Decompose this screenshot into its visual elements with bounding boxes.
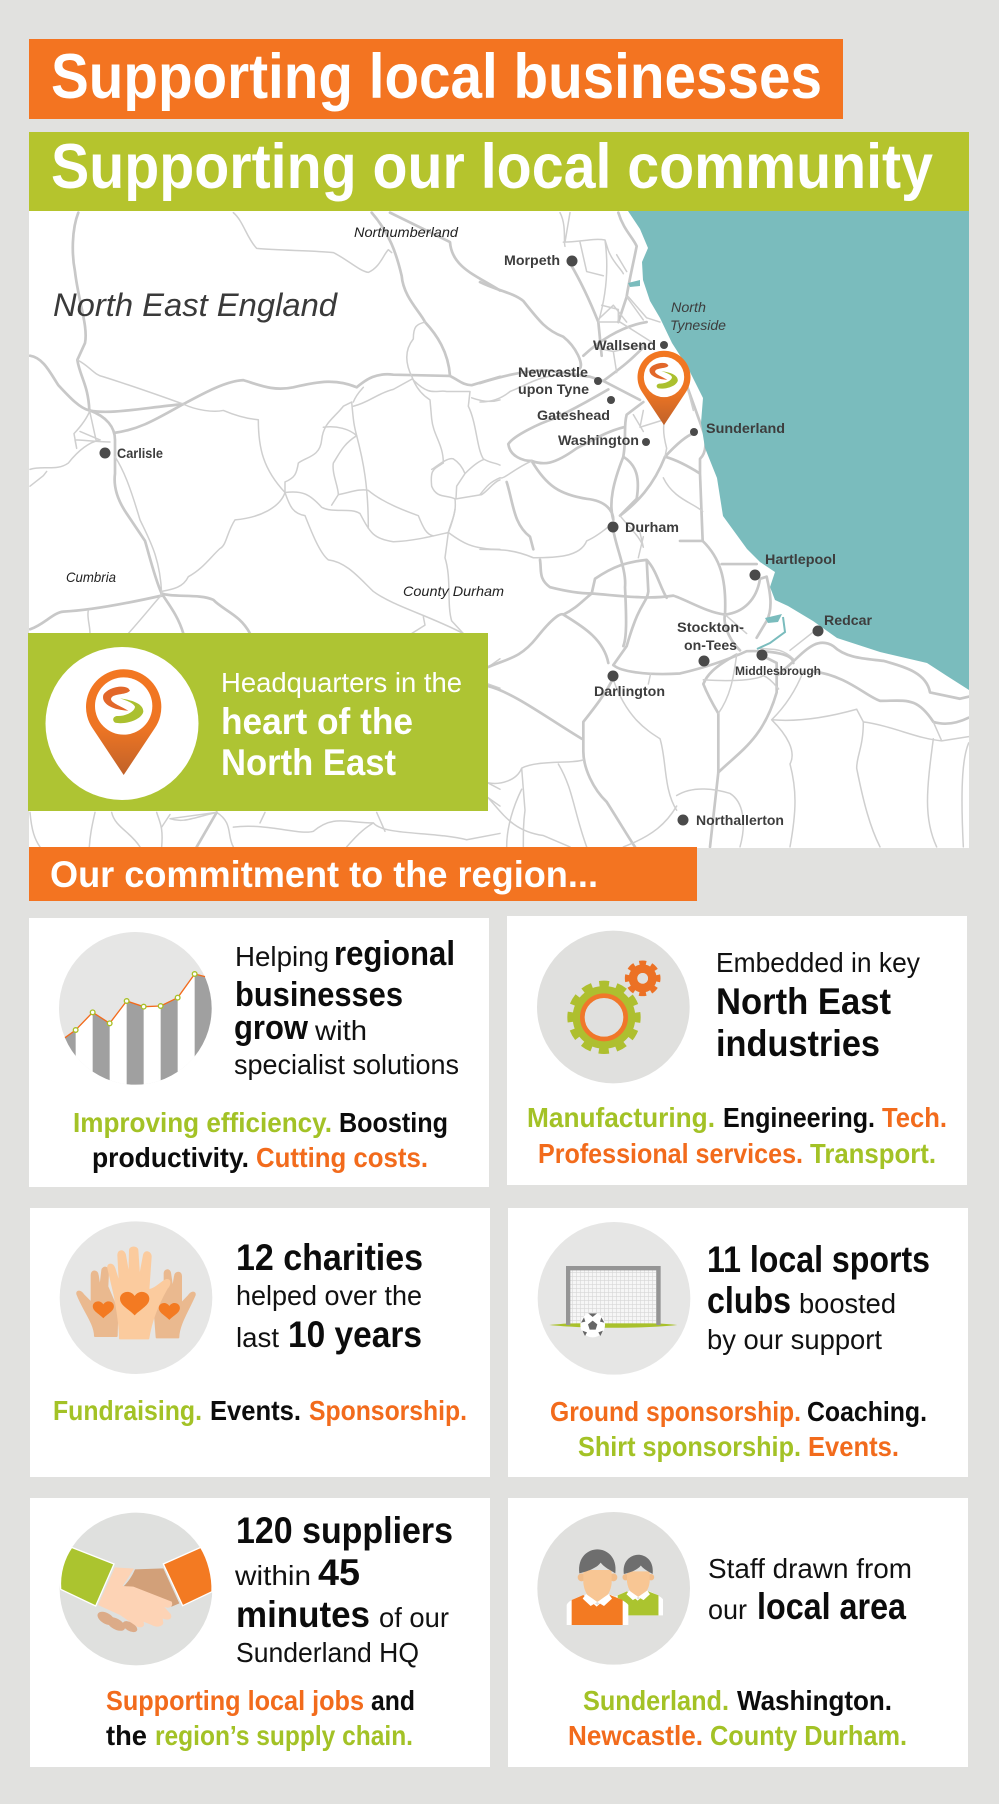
- panel: suppliers: [30, 1498, 490, 1767]
- heading text: specialist solutions: [234, 1049, 459, 1080]
- heading text: by our support: [707, 1324, 882, 1355]
- map labels and town markers: North: [671, 300, 706, 315]
- map labels and town markers: Gateshead: [537, 408, 610, 423]
- caption text: Washington.: [737, 1685, 892, 1716]
- heading text: [234, 1510, 453, 1668]
- caption text: Boosting: [339, 1107, 448, 1138]
- callout: headquarters: heart of the: [221, 701, 413, 742]
- caption text: Manufacturing.: [527, 1102, 715, 1133]
- caption text: region’s supply chain.: [155, 1720, 413, 1751]
- map labels and town markers: County Durham: [403, 583, 504, 599]
- icon: gears: [537, 931, 690, 1083]
- caption text: [568, 1685, 907, 1751]
- heading text: 10 years: [288, 1314, 422, 1355]
- map labels and town markers: North East England: [53, 287, 338, 323]
- caption text: Professional services.: [538, 1138, 803, 1169]
- heading text: within: [234, 1560, 311, 1591]
- caption text: Events.: [808, 1431, 899, 1462]
- panel: regional businesses: [29, 918, 489, 1187]
- icon: handshake: [60, 1513, 212, 1665]
- icon: two staff members: [537, 1512, 690, 1665]
- caption text: Supporting local jobs: [106, 1685, 364, 1716]
- caption text: Tech.: [882, 1102, 947, 1133]
- panel: staff: [508, 1498, 968, 1767]
- heading text: minutes: [236, 1594, 370, 1635]
- heading text: [716, 947, 920, 1064]
- caption text: productivity.: [92, 1142, 249, 1173]
- caption text: Cutting costs.: [256, 1142, 428, 1173]
- caption text: Newcastle.: [568, 1720, 703, 1751]
- caption text: Transport.: [810, 1138, 936, 1169]
- sea: [628, 211, 969, 690]
- heading text: [708, 1553, 912, 1627]
- callout: headquarters: North East: [221, 742, 396, 783]
- map labels and town markers: Durham: [625, 520, 679, 535]
- heading text: Helping: [235, 941, 329, 972]
- heading text: Sunderland HQ: [236, 1637, 419, 1668]
- caption text: Improving efficiency.: [73, 1107, 332, 1138]
- heading text: 11 local sports: [707, 1239, 930, 1280]
- heading text: 45: [318, 1552, 360, 1593]
- heading text: of our: [379, 1602, 449, 1633]
- heading text: industries: [716, 1023, 880, 1064]
- caption text: Sunderland.: [583, 1685, 729, 1716]
- heading text: Embedded in key: [716, 947, 920, 978]
- heading text: regional: [334, 935, 455, 973]
- icon: large location pin: [86, 669, 161, 775]
- map labels and town markers: Hartlepool: [765, 552, 836, 567]
- caption text: Engineering.: [723, 1102, 875, 1133]
- callout: headquarters: Headquarters in the: [221, 667, 462, 698]
- caption text: [106, 1685, 415, 1751]
- icon: growth chart: [59, 932, 212, 1085]
- caption text: Events.: [210, 1395, 301, 1426]
- caption text: and: [371, 1685, 415, 1716]
- caption text: [73, 1107, 448, 1173]
- caption text: [550, 1396, 927, 1462]
- map labels and town markers: Northallerton: [696, 813, 784, 828]
- map labels and town markers: Redcar: [824, 613, 873, 628]
- heading text: last: [236, 1322, 279, 1353]
- caption text: [527, 1102, 947, 1169]
- title: supporting our local community: Supporting our local community: [51, 132, 933, 202]
- map labels and town markers: Carlisle: [117, 446, 163, 461]
- map labels and town markers: Newcastle: [518, 365, 589, 380]
- heading text: 12 charities: [236, 1237, 423, 1278]
- caption text: Shirt sponsorship.: [578, 1431, 801, 1462]
- estuary: [628, 280, 785, 649]
- heading text: [236, 1237, 423, 1355]
- panel: sports clubs: [508, 1208, 968, 1477]
- caption text: [53, 1395, 467, 1426]
- heading text: local area: [757, 1586, 906, 1627]
- panel: industries: [507, 916, 967, 1185]
- map labels and town markers: Tyneside: [670, 318, 726, 333]
- map labels and town markers: Wallsend: [593, 338, 656, 353]
- heading text: Staff drawn from: [708, 1553, 912, 1584]
- heading text: with: [314, 1015, 367, 1046]
- panel: charities: [30, 1208, 490, 1477]
- heading text: [707, 1239, 930, 1355]
- heading text: businesses: [235, 976, 403, 1014]
- caption text: Sponsorship.: [309, 1395, 467, 1426]
- caption text: County Durham.: [710, 1720, 907, 1751]
- map labels and town markers: on-Tees: [684, 638, 737, 653]
- heading text: boosted: [799, 1288, 896, 1319]
- heading: our commitment: [29, 847, 697, 901]
- caption text: Ground sponsorship.: [550, 1396, 801, 1427]
- heading text: [234, 935, 459, 1080]
- icon: small location pin on map: [638, 351, 690, 425]
- icon: goal and football: [538, 1222, 690, 1375]
- caption text: Coaching.: [807, 1396, 927, 1427]
- map labels and town markers: [53, 224, 873, 828]
- title: supporting local businesses: Supporting local businesses: [51, 42, 822, 112]
- map labels and town markers: Middlesbrough: [735, 666, 821, 678]
- map labels and town markers: upon Tyne: [518, 382, 590, 397]
- heading text: 120 suppliers: [236, 1510, 453, 1551]
- heading text: clubs: [707, 1280, 791, 1321]
- caption text: the: [106, 1720, 147, 1751]
- icon: hands with hearts: [60, 1221, 212, 1374]
- heading text: our: [708, 1594, 747, 1625]
- map labels and town markers: Darlington: [594, 684, 665, 699]
- map labels and town markers: Washington: [558, 433, 639, 448]
- map labels and town markers: Sunderland: [706, 421, 785, 436]
- map labels and town markers: Morpeth: [504, 253, 560, 268]
- callout: headquarters: [28, 633, 488, 811]
- map labels and town markers: Stockton-: [677, 620, 744, 635]
- map panel: North East England: [29, 211, 969, 848]
- heading text: North East: [716, 981, 891, 1022]
- map labels and town markers: Cumbria: [66, 569, 116, 585]
- heading text: helped over the: [236, 1280, 422, 1311]
- map labels and town markers: Northumberland: [354, 224, 459, 240]
- heading text: grow: [234, 1009, 309, 1047]
- caption text: Fundraising.: [53, 1395, 202, 1426]
- heading: our commitment: Our commitment to the region...: [50, 854, 598, 895]
